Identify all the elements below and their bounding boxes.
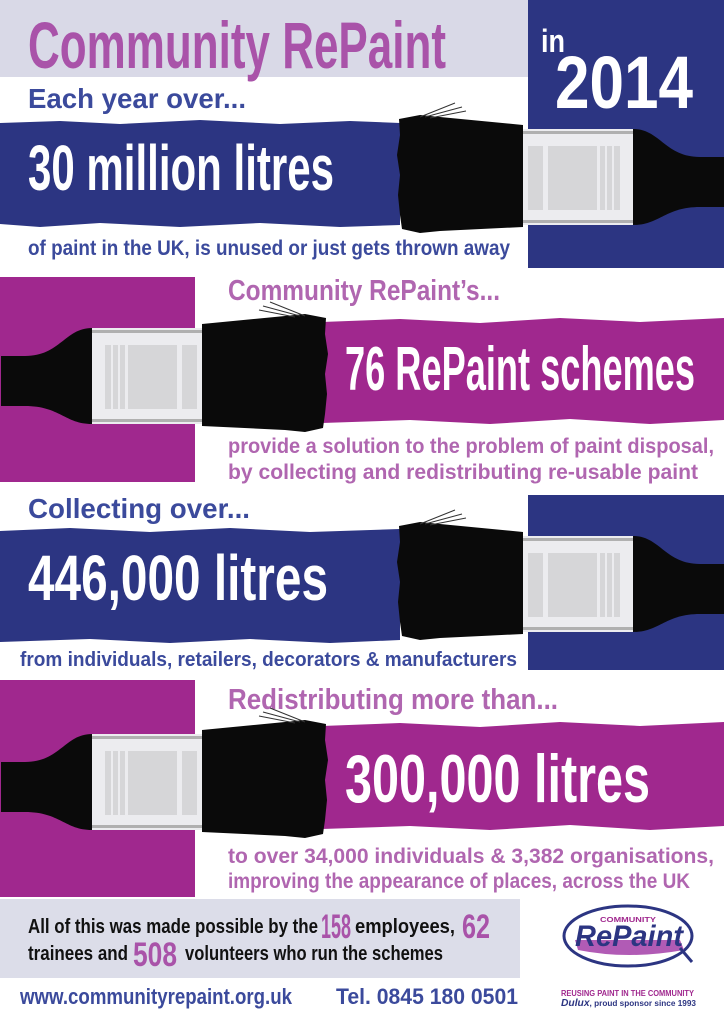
navy block 3 — [528, 495, 724, 670]
band: 76 schemes — [322, 318, 724, 424]
text: provide: by collecting and redistributing re-usable paint — [228, 461, 698, 484]
footer panel: 158 — [321, 908, 351, 946]
text: provide: provide a solution to the problem of paint disposal, — [228, 435, 714, 458]
text: to over: to over 34,000 individuals & 3,382 organisations, — [228, 845, 714, 868]
text: from individuals: from individuals, retailers, decorators & manufacturers — [20, 649, 517, 671]
website: www.communityrepaint.org.uk — [19, 984, 293, 1009]
heading: each year: Each year over... — [28, 83, 246, 114]
year panel: 2014 — [555, 41, 693, 124]
logo: COMMUNITY — [600, 917, 656, 924]
footer panel: employees, — [355, 916, 455, 938]
footer panel: trainees and — [28, 943, 128, 965]
title: Community RePaint — [28, 8, 446, 82]
text: of paint: of paint in the UK, is unused or just gets thrown away — [28, 237, 510, 260]
telephone: Tel. 0845 180 0501 — [336, 984, 518, 1009]
text: to over — [228, 845, 714, 893]
heading: Community RePaint's: Community RePaint’s... — [228, 275, 500, 307]
brush 4 — [1, 708, 328, 838]
band: 446,000: 446,000 litres — [28, 542, 328, 614]
footer panel: volunteers who run the schemes — [185, 943, 443, 965]
logo: RePaint — [575, 920, 685, 953]
brush 1 — [397, 103, 724, 233]
band: 300,000 — [322, 722, 724, 830]
band: 30 million — [0, 120, 400, 227]
brush 3 — [397, 510, 724, 640]
year panel — [528, 0, 724, 268]
band: 446,000 — [0, 528, 400, 643]
magenta block 2 — [0, 277, 195, 482]
logo: Dulux, proud sponsor since 1993 — [561, 998, 697, 1009]
text: to over: improving the appearance of places, across the UK — [228, 870, 690, 893]
band: 30 million: 30 million litres — [28, 132, 334, 204]
footer panel — [0, 899, 520, 978]
header band — [0, 0, 528, 77]
year panel: in — [541, 23, 565, 59]
heading: redistributing: Redistributing more than... — [228, 684, 558, 716]
footer panel: 62 — [462, 908, 490, 946]
footer panel: All of this was made possible by the — [28, 916, 318, 938]
brush 2 — [1, 302, 328, 432]
magenta block 4 — [0, 680, 195, 897]
heading: collecting: Collecting over... — [28, 493, 250, 524]
text: provide — [228, 435, 714, 484]
footer panel: 508 — [133, 936, 177, 974]
logo — [561, 906, 697, 1009]
logo: REUSING PAINT IN THE COMMUNITY — [561, 989, 695, 998]
